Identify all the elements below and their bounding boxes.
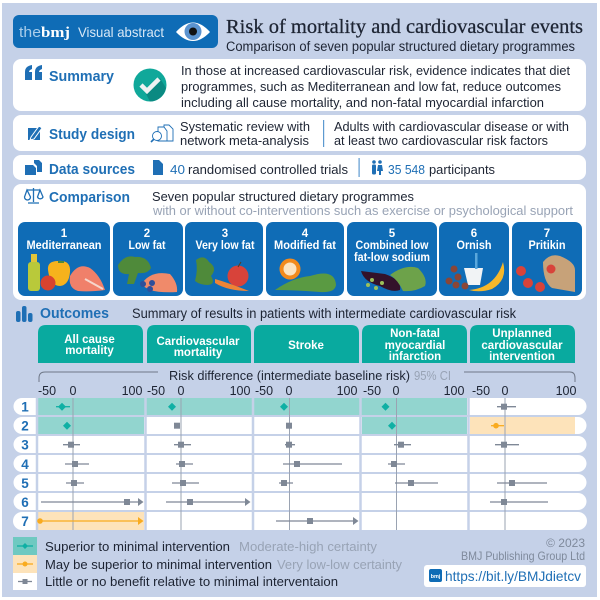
- header: cardiovascular mortality: [147, 325, 251, 363]
- card 7: Pritikin: [512, 222, 582, 296]
- header: non-fatal myocardial infarction: infarction: [389, 351, 441, 363]
- header: all cause mortality: All cause: [64, 334, 115, 346]
- card 1: Mediterranean: Mediterranean: [26, 240, 102, 252]
- icon: pencil on pad: [28, 126, 42, 140]
- card 7: Pritikin: 7: [544, 228, 550, 240]
- header: unplanned cardiovascular intervention: intervention: [489, 351, 555, 363]
- icon: documents: [25, 160, 42, 175]
- icon: search documents: [151, 125, 173, 142]
- header: the bmj visual abstract banner: [13, 15, 218, 48]
- card 3: Very low fat: Very low fat: [196, 240, 255, 252]
- copyright: BMJ Publishing Group Ltd: [461, 549, 585, 563]
- header: stroke: Stroke: [288, 340, 324, 352]
- legend: [13, 537, 402, 590]
- design text: network meta-analysis: [180, 133, 309, 148]
- axis tick labels: 0: [502, 384, 509, 398]
- summary heading: Summary: [49, 69, 114, 85]
- row 4 background: [14, 455, 587, 472]
- card 4: Modified fat: 4: [302, 228, 309, 240]
- copyright: © 2023: [546, 536, 585, 550]
- card 5: Combined low fat-low sodium: fat-low sodium: [354, 252, 430, 264]
- axis tick labels: 100: [230, 384, 250, 398]
- card 2: Low fat: Low fat: [128, 240, 166, 252]
- column headers: [38, 325, 575, 363]
- axis tick labels: -50: [38, 384, 56, 398]
- title: Risk of mortality and cardiovascular events: [226, 16, 583, 38]
- population text: [334, 119, 569, 148]
- icon: document: [153, 160, 163, 175]
- card 1: Mediterranean: [18, 222, 110, 296]
- icon: bar chart: [16, 306, 32, 322]
- header: all cause mortality: mortality: [65, 345, 114, 357]
- panel: comparison: [13, 184, 586, 300]
- card 5: Combined low fat-low sodium: 5: [389, 228, 396, 240]
- participants count: [388, 162, 495, 177]
- card 3: Very low fat: 3: [222, 228, 228, 240]
- header: non-fatal myocardial infarction: [362, 325, 467, 363]
- row 2 background: [14, 417, 587, 434]
- axis tick labels: -50: [363, 384, 381, 398]
- axis tick labels: 100: [337, 384, 357, 398]
- axis tick labels: -50: [472, 384, 490, 398]
- panel: summary: [13, 59, 586, 111]
- legend: superior: Moderate-high certainty: [239, 539, 377, 554]
- header: unplanned cardiovascular intervention: [470, 325, 575, 363]
- row numbers: [21, 400, 29, 529]
- header: non-fatal myocardial infarction: Non-fatal: [390, 328, 440, 340]
- axis tick labels: [38, 384, 576, 398]
- outcomes heading: Outcomes: [40, 306, 109, 322]
- comparison text: Seven popular structured dietary programmes: [152, 189, 414, 204]
- outcomes subtitle: Summary of results in patients with intermediate cardiovascular risk: [132, 306, 516, 321]
- summary text: [181, 63, 570, 110]
- axis tick labels: 0: [178, 384, 185, 398]
- card 2: Low fat: [113, 222, 183, 296]
- row numbers: 7: [21, 514, 29, 529]
- card 1: Mediterranean: 1: [61, 228, 68, 240]
- trials count: randomised controlled trials: [188, 162, 348, 177]
- row numbers: 4: [21, 457, 29, 472]
- comparison text: with or without co-interventions such as exercise or psychological support: [152, 203, 573, 218]
- card 7: Pritikin: Pritikin: [528, 240, 566, 252]
- legend: may be superior: [13, 555, 402, 573]
- link box: [424, 565, 586, 587]
- card 3: Very low fat: [185, 222, 263, 296]
- icon: scales: [24, 188, 43, 203]
- data sources heading: Data sources: [49, 162, 135, 178]
- header: the bmj visual abstract banner: Visual abstract: [78, 24, 164, 40]
- population text: at least two cardiovascular risk factors: [334, 133, 548, 148]
- trials count: 40: [170, 162, 185, 177]
- header: cardiovascular mortality: mortality: [174, 347, 223, 359]
- card 6: Ornish: 6: [471, 228, 477, 240]
- header: stroke: [254, 325, 359, 363]
- header: unplanned cardiovascular intervention: cardiovascular: [481, 340, 563, 352]
- card 4: Modified fat: [266, 222, 344, 296]
- axis tick labels: 100: [556, 384, 576, 398]
- legend: superior: Superior to minimal intervention: [45, 539, 230, 554]
- legend: may be superior: Very low-low certainty: [277, 557, 402, 572]
- row 5 background: [14, 474, 587, 491]
- axis title: 95% CI: [414, 368, 451, 383]
- link box: bmj: [431, 574, 441, 580]
- panel: study design: [13, 115, 586, 151]
- card 6: Ornish: Ornish: [456, 240, 492, 252]
- row numbers: 3: [21, 438, 29, 452]
- summary text: programmes, such as Mediterranean and low fat, reduce outcomes: [181, 79, 561, 94]
- header: non-fatal myocardial infarction: myocardial: [385, 340, 445, 352]
- card 5: Combined low fat-low sodium: Combined low: [356, 240, 429, 252]
- axis tick labels: 100: [122, 384, 142, 398]
- population text: Adults with cardiovascular disease or with: [334, 119, 569, 134]
- summary text: including all cause mortality, and non-fatal myocardial infarction: [181, 95, 544, 110]
- card 2: Low fat: 2: [144, 228, 150, 240]
- row 6 background: [14, 493, 587, 510]
- panel: data sources: [13, 155, 586, 180]
- row 1 background: [14, 398, 587, 415]
- axis tick labels: 0: [286, 384, 293, 398]
- header: all cause mortality: [38, 325, 143, 363]
- icon: check mark: [134, 68, 166, 102]
- design text: Systematic review with: [180, 119, 310, 134]
- legend: little or no benefit: Little or no benefit relative to minimal interventaion: [45, 574, 338, 589]
- link box: https://bit.ly/BMJdietcv: [445, 568, 581, 584]
- axis tick labels: 0: [70, 384, 77, 398]
- header: the bmj visual abstract banner: bmj: [41, 25, 70, 41]
- participants count: participants: [429, 162, 495, 177]
- legend: may be superior: May be superior to minimal intervention: [45, 557, 272, 572]
- design text: [180, 119, 310, 148]
- row numbers: 2: [21, 418, 29, 434]
- summary text: In those at increased cardiovascular risk, evidence indicates that diet: [181, 63, 570, 78]
- icon: quote: [25, 65, 42, 80]
- axis tick labels: -50: [147, 384, 165, 398]
- axis title: Risk difference (intermediate baseline risk): [169, 368, 410, 383]
- participants count: 35 548: [388, 162, 425, 177]
- row numbers: 1: [21, 400, 29, 414]
- subtitle: Comparison of seven popular structured dietary programmes: [226, 39, 575, 54]
- superior markers (teal diamonds): [56, 403, 396, 430]
- header: the bmj visual abstract banner: the: [19, 24, 41, 41]
- header: unplanned cardiovascular intervention: Unplanned: [492, 328, 552, 340]
- header: cardiovascular mortality: Cardiovascular: [156, 336, 240, 348]
- axis tick labels: 0: [393, 384, 400, 398]
- icon: people: [372, 160, 383, 175]
- comparison heading: Comparison: [49, 190, 130, 206]
- axis tick labels: 100: [444, 384, 464, 398]
- study design heading: Study design: [49, 127, 135, 143]
- axis tick labels: -50: [255, 384, 273, 398]
- row 7 background: [13, 512, 587, 530]
- card 5: Combined low fat-low sodium: [347, 222, 437, 296]
- may be superior markers (orange): [37, 423, 504, 525]
- row numbers: 5: [21, 476, 29, 491]
- little or no benefit markers (grey): [41, 404, 548, 525]
- forest plot grid: [13, 398, 587, 530]
- card 4: Modified fat: Modified fat: [274, 240, 336, 252]
- row 3 background: [14, 436, 587, 453]
- copyright: [461, 536, 585, 563]
- row numbers: 6: [21, 495, 29, 510]
- legend: superior: [13, 537, 377, 555]
- card 6: Ornish: [439, 222, 509, 296]
- comparison text: [152, 189, 573, 218]
